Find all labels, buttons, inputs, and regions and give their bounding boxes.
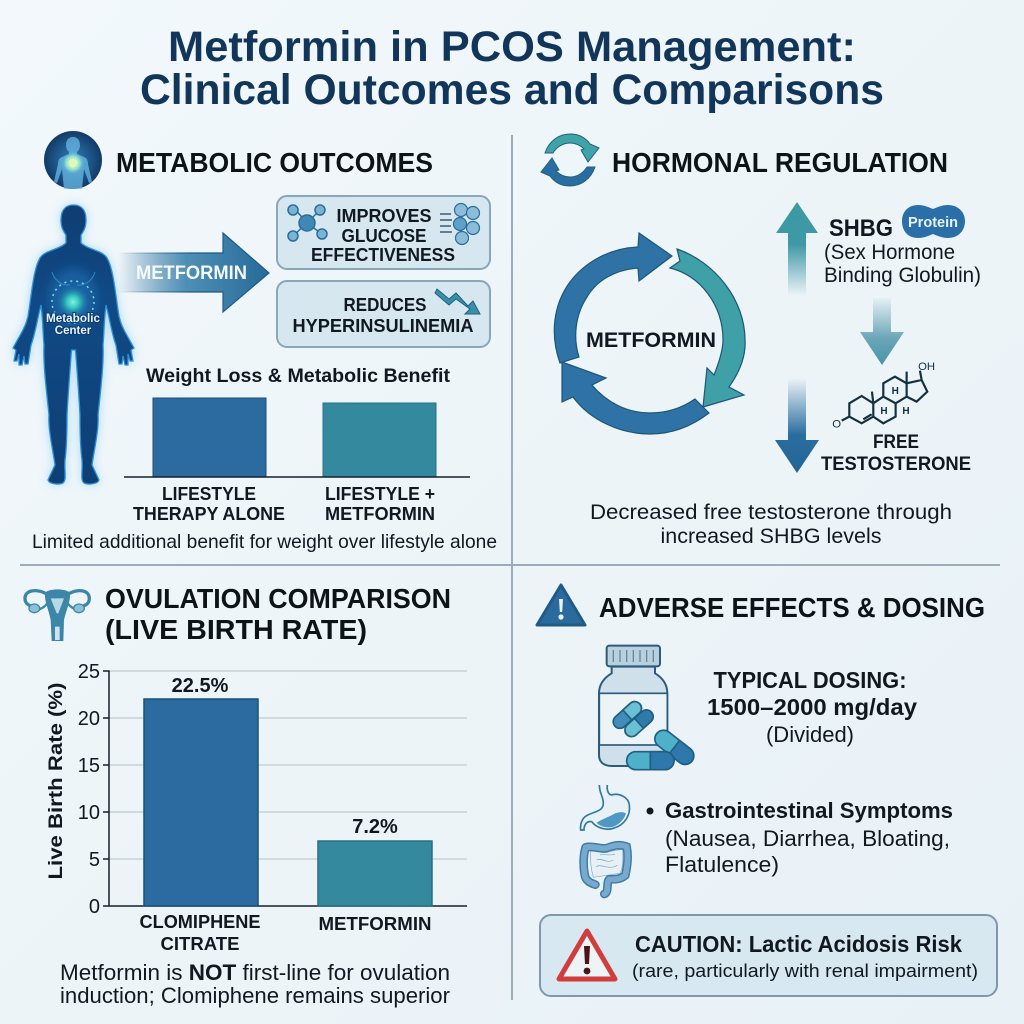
cycle diagram: metformin: METFORMIN (586, 329, 716, 352)
arrow: metformin: METFORMIN (136, 263, 247, 284)
panel: metabolic outcomes (13, 131, 497, 553)
icon: molecule (288, 205, 327, 241)
box: reduces hyperinsulinemia: HYPERINSULINEMIA (292, 315, 474, 336)
heading: metabolic outcomes: METABOLIC OUTCOMES (116, 147, 433, 178)
title (140, 23, 884, 114)
icon: metabolic badge (44, 131, 102, 189)
arrow: SHBG lowers free testosterone (860, 298, 904, 365)
SHBG label: SHBG (829, 215, 893, 242)
icon: red warning (559, 931, 615, 979)
callout: caution (540, 915, 997, 996)
heading: ovulation comparison: OVULATION COMPARISON (105, 583, 451, 614)
bar: metformin: 7.2% (352, 816, 398, 838)
icon: testosterone molecule: OH (918, 361, 935, 373)
icon: testosterone molecule: H (902, 406, 910, 417)
bar: clomiphene citrate: CITRATE (160, 934, 240, 954)
caption: decreased free testosterone: increased SHBG levels (660, 524, 882, 548)
cycle diagram: metformin (554, 233, 745, 434)
bar chart: live birth rate: 5 (89, 849, 100, 871)
callout: caution: (rare, particularly with renal impairment) (632, 961, 978, 981)
icon: cycle arrows (541, 134, 599, 186)
dosing text: 1500–2000 mg/day (707, 694, 917, 720)
icon: testosterone molecule: O (832, 418, 841, 430)
arrow: SHBG up (776, 202, 818, 296)
bar: clomiphene citrate: 22.5% (172, 675, 229, 697)
caption: decreased free testosterone: Decreased free testosterone through (590, 500, 952, 524)
bar chart: weight loss (124, 366, 470, 524)
box: improves glucose effectiveness: EFFECTIVENESS (311, 244, 455, 265)
human figure (13, 205, 134, 484)
icon: testosterone molecule (832, 361, 935, 430)
GI symptoms list (646, 798, 953, 877)
SHBG label (824, 205, 981, 287)
heading: ovulation comparison (105, 583, 451, 645)
bar chart: weight loss: Weight Loss & Metabolic Benefit (146, 366, 451, 387)
box: improves glucose effectiveness (277, 196, 490, 269)
caption: limited benefit: Limited additional benefit for weight over lifestyle alone (32, 531, 497, 553)
bar chart: weight loss: LIFESTYLE + (325, 484, 435, 504)
icon: intestine (584, 845, 628, 894)
icon: testosterone molecule: H (892, 386, 899, 397)
icon: cells (440, 204, 480, 244)
box: reduces hyperinsulinemia (277, 281, 490, 347)
bar: metformin (318, 816, 432, 934)
caption: not first-line: Metformin is NOT first-line for ovulation (60, 960, 450, 985)
heading: hormonal regulation: HORMONAL REGULATION (612, 147, 948, 178)
dosing text: (Divided) (766, 722, 854, 747)
caption: decreased free testosterone (590, 500, 952, 548)
bar chart: live birth rate: 25 (78, 661, 100, 683)
icon: stomach (581, 785, 630, 830)
heading: adverse effects: ADVERSE EFFECTS & DOSING (599, 592, 985, 623)
bar chart: live birth rate: 15 (78, 755, 100, 777)
icon: protein pill: Protein (908, 215, 958, 231)
caption: not first-line (60, 960, 450, 1008)
bar chart: live birth rate (45, 661, 467, 954)
arrow: metformin (118, 233, 269, 312)
bar chart: weight loss: METFORMIN (325, 504, 435, 524)
label: free testosterone: TESTOSTERONE (821, 454, 971, 475)
panel: ovulation comparison (25, 583, 467, 1008)
dosing text (707, 667, 917, 747)
caption: not first-line: induction; Clomiphene remains superior (60, 983, 450, 1008)
icon: warning triangle (537, 585, 585, 625)
callout: caution: CAUTION: Lactic Acidosis Risk (635, 931, 962, 957)
bar chart: live birth rate: Live Birth Rate (%) (45, 683, 67, 879)
icon: falling trend arrow (435, 289, 480, 314)
dosing text: TYPICAL DOSING: (714, 667, 906, 693)
SHBG label: Binding Globulin) (824, 263, 981, 287)
bar chart: weight loss: THERAPY ALONE (133, 504, 285, 524)
bar chart: weight loss: LIFESTYLE (162, 484, 256, 504)
panel: adverse effects and dosing (537, 585, 997, 996)
bar chart: live birth rate: 20 (78, 708, 100, 730)
bar: clomiphene citrate: CLOMIPHENE (140, 912, 260, 932)
title: Metformin in PCOS Management: (168, 23, 856, 71)
GI symptoms list: Gastrointestinal Symptoms (665, 798, 953, 823)
box: improves glucose effectiveness: GLUCOSE (342, 225, 426, 246)
human figure: Center (55, 325, 92, 337)
box: improves glucose effectiveness: IMPROVES (336, 205, 432, 226)
icon: protein pill (902, 205, 965, 238)
panel: hormonal regulation (541, 134, 981, 548)
bar chart: live birth rate: 10 (78, 802, 100, 824)
GI symptoms list: Flatulence) (665, 852, 779, 877)
box: reduces hyperinsulinemia: REDUCES (344, 294, 426, 315)
label: free testosterone (821, 432, 971, 475)
icon: uterus (25, 589, 89, 641)
bar: metformin: METFORMIN (318, 914, 432, 934)
bar chart: live birth rate: 0 (89, 896, 100, 918)
bar: clomiphene citrate (140, 675, 260, 954)
heading: ovulation comparison: (LIVE BIRTH RATE) (105, 614, 367, 645)
title: Clinical Outcomes and Comparisons (140, 66, 884, 114)
icon: testosterone molecule: H (880, 406, 888, 417)
human figure: Metabolic (46, 313, 101, 325)
arrow: free testosterone down (775, 378, 819, 473)
icon: pill bottle (599, 646, 697, 770)
label: free testosterone: FREE (873, 432, 919, 453)
SHBG label: (Sex Hormone (824, 240, 955, 264)
GI symptoms list: (Nausea, Diarrhea, Bloating, (665, 826, 950, 851)
